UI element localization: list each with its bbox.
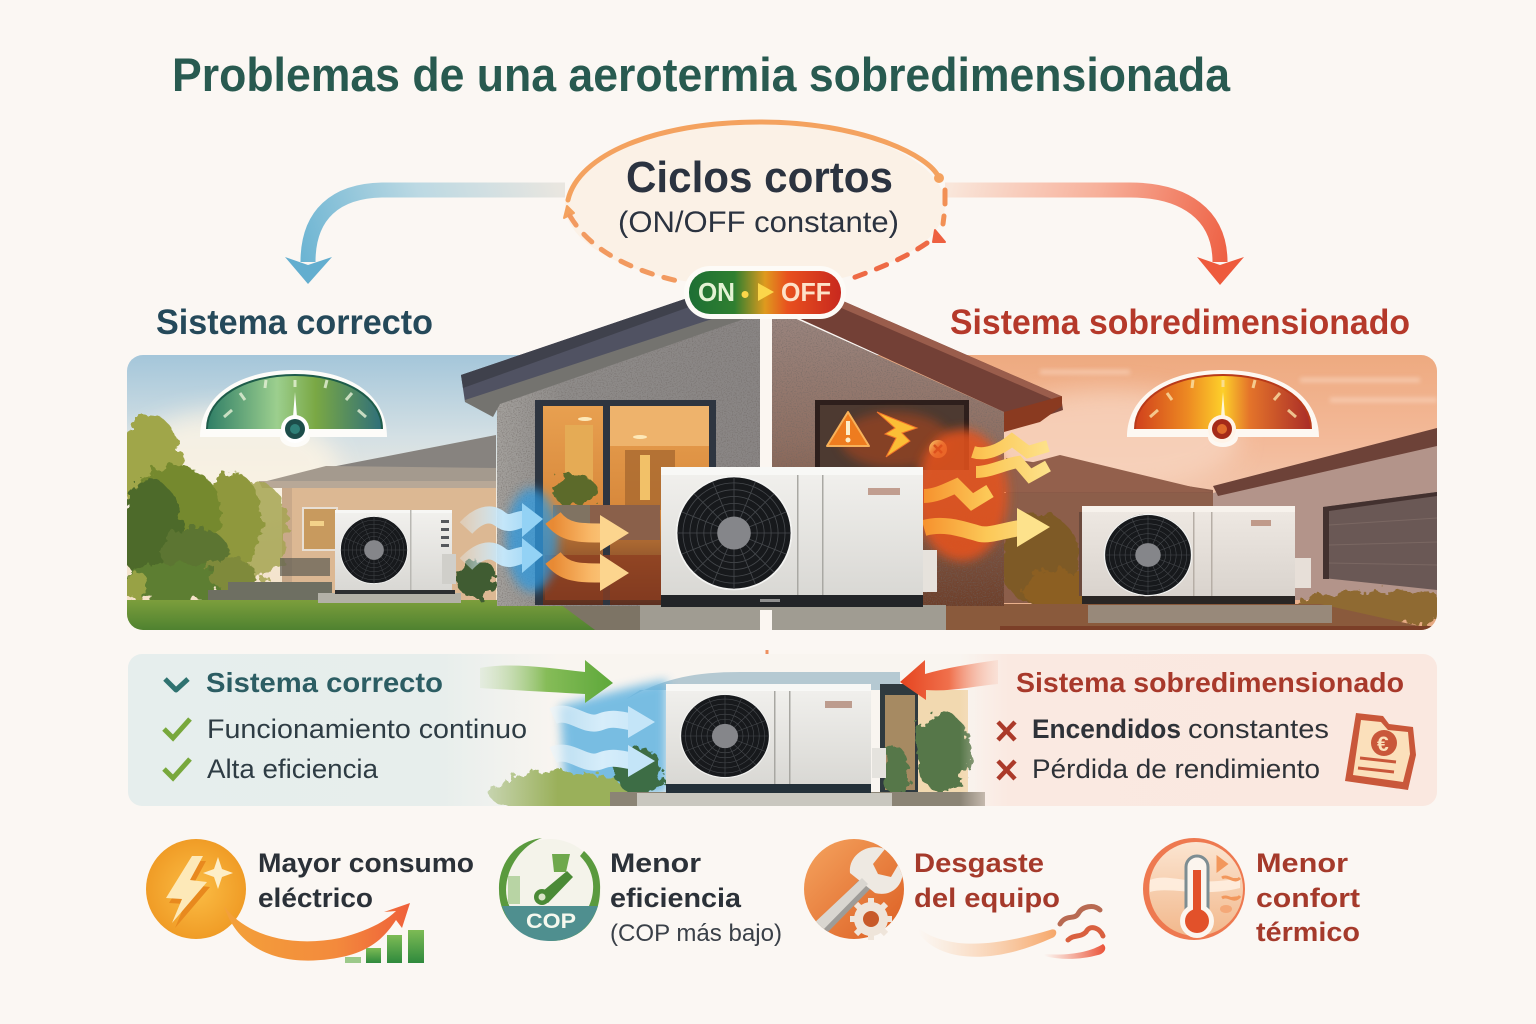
arrow: rising consumption — [224, 903, 410, 961]
text: wear: Desgaste — [914, 848, 1044, 878]
text: comfort — [1256, 848, 1360, 947]
gravel left — [563, 606, 640, 630]
cycle bubble: short cycles — [564, 122, 945, 287]
ground right — [946, 604, 1437, 630]
big unit centre — [661, 467, 937, 607]
heading: correct system: Sistema correcto — [156, 303, 433, 342]
icon: cop gauge: COP — [526, 910, 576, 933]
text: lower efficiency: Menor — [610, 848, 702, 878]
icon: energy — [146, 839, 246, 939]
bush left of wall — [456, 558, 496, 598]
sun glow — [156, 400, 342, 503]
check heading: correct — [165, 679, 188, 690]
icon: check — [164, 759, 190, 778]
icon: lightning bolt — [877, 412, 917, 457]
unit right — [1079, 506, 1311, 604]
text: comfort: térmico — [1256, 917, 1360, 947]
decoration: friction lines — [918, 907, 1105, 959]
benefit: equipment wear — [804, 839, 1105, 959]
icon: cop gauge — [499, 838, 601, 941]
main house right wall — [772, 308, 1004, 606]
on off switch — [684, 266, 846, 319]
house behind compact unit — [625, 672, 968, 795]
title: Problemas de una aerotermia sobredimensionada — [172, 48, 1231, 101]
panel: comparison strip — [128, 654, 1437, 816]
text: comfort: Menor — [1256, 848, 1349, 878]
text: lower efficiency: eficiencia — [610, 883, 742, 913]
heading: oversized system: Sistema sobredimensionado — [950, 303, 1410, 342]
green arrow — [480, 660, 613, 703]
item: constant start-ups — [1032, 714, 1329, 744]
icon: x error — [929, 440, 947, 458]
icon: warning triangle — [827, 412, 869, 446]
text: lower efficiency: (COP más bajo) — [610, 920, 782, 947]
slab centre — [318, 593, 1332, 630]
icon: check — [164, 719, 190, 738]
main roof left — [461, 270, 770, 417]
icon: thermometer — [1143, 838, 1245, 940]
airflow glow blue — [506, 488, 558, 592]
icon: euro invoice: € — [1377, 733, 1389, 756]
text: wear: del equipo — [914, 883, 1060, 913]
strip backdrop — [766, 654, 768, 666]
text: higher consumption: Mayor consumo — [258, 848, 474, 878]
blue wave arrows — [553, 706, 655, 777]
main roof right — [772, 270, 1063, 432]
heat arrows right — [924, 440, 1050, 547]
cool arrows left — [466, 503, 543, 573]
heading: short cycles: Ciclos cortos — [626, 153, 893, 202]
blue airflow backdrop — [560, 680, 667, 793]
panel: house scene — [118, 270, 1455, 630]
text: higher consumption: eléctrico — [258, 883, 373, 913]
steps — [208, 582, 332, 600]
gravel — [610, 792, 985, 806]
neighbour house right — [1004, 455, 1213, 603]
bushes — [490, 712, 970, 816]
trees left — [118, 415, 288, 602]
compact heat pump — [666, 684, 886, 793]
icon: cross — [998, 722, 1015, 740]
strip heading: oversized: Sistema sobredimensionado — [1016, 667, 1404, 698]
icon: euro invoice — [1345, 713, 1416, 790]
on off switch: ON — [698, 277, 735, 307]
neighbour house left — [259, 435, 496, 600]
right panel tint — [960, 654, 1437, 806]
item: performance loss: Pérdida de rendimiento — [1032, 754, 1320, 784]
lawn — [127, 600, 600, 630]
benefit: higher power consumption — [146, 839, 474, 963]
clouds right — [1040, 372, 1437, 400]
text: wear — [914, 848, 1060, 913]
left panel tint — [128, 654, 558, 806]
main house left wall — [497, 308, 760, 606]
airflow glow hot — [916, 429, 1008, 561]
strip heading: correct: Sistema correcto — [206, 667, 443, 698]
text: higher consumption — [258, 848, 474, 913]
item: high efficiency: Alta eficiencia — [207, 754, 379, 784]
chart: rising bars — [345, 930, 424, 963]
wall stucco texture — [497, 308, 1004, 606]
warning window right — [815, 400, 969, 470]
text: lower efficiency — [610, 848, 782, 947]
center divider upper — [760, 310, 772, 470]
benefit: lower efficiency — [499, 838, 782, 947]
red arrow — [900, 660, 998, 700]
gauge: oversized system — [1127, 370, 1319, 447]
benefit: lower thermal comfort — [1143, 838, 1360, 947]
item: constant start-ups: constantes — [1188, 714, 1329, 744]
text: comfort: confort — [1256, 883, 1360, 913]
dashed connector — [766, 650, 768, 682]
slab — [637, 793, 892, 806]
subheading: constant on off: (ON/OFF constante) — [618, 206, 899, 239]
small unit left — [335, 510, 456, 594]
sky right — [877, 355, 1437, 630]
bushes right — [1000, 514, 1455, 626]
item: continuous operation: Funcionamiento continuo — [207, 714, 527, 744]
window left — [535, 400, 716, 605]
arrow: to oversized system — [945, 190, 1244, 285]
gauge: correct system — [200, 370, 387, 447]
on off switch: OFF — [781, 277, 831, 307]
icon: wrench and gear — [804, 839, 904, 940]
sky left — [127, 355, 520, 630]
arrow: to correct system — [285, 190, 565, 284]
item: constant start-ups: Encendidos — [1032, 714, 1181, 744]
far house right — [1213, 428, 1437, 600]
warm arrows left — [553, 515, 629, 591]
icon: cross — [998, 761, 1015, 779]
